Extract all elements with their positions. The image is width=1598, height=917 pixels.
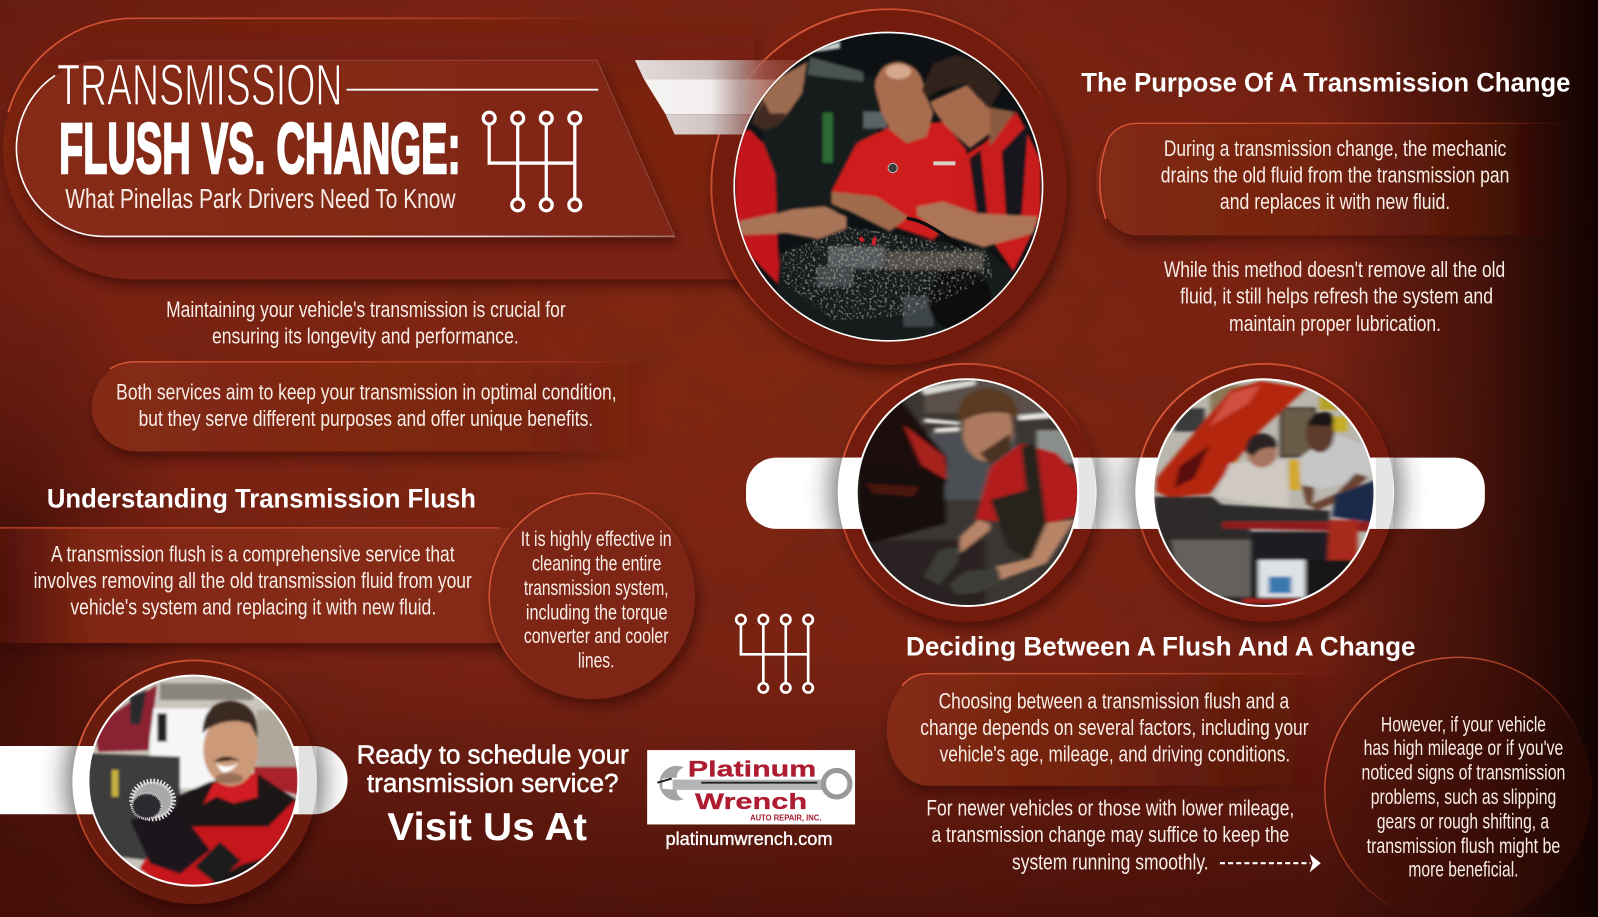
ring and white band: bottom left — [0, 654, 348, 909]
text: change method: maintain proper lubrication. — [1229, 311, 1441, 336]
panel: deciding description — [887, 674, 1345, 786]
text: call to action: Visit Us At — [387, 806, 587, 849]
bald man — [832, 122, 967, 240]
ring: top photo — [710, 8, 1067, 365]
callout: highly effective — [489, 493, 695, 699]
title: flush vs change: FLUSH VS. CHANGE: — [59, 109, 461, 189]
icon: gear shifter — [483, 112, 581, 211]
panel: deciding description: vehicle's age, mileage, and driving conditions. — [940, 741, 1290, 766]
icon: small gear shifter — [736, 615, 813, 693]
logo: platinum wrench — [647, 750, 855, 824]
callout: highly effective: converter and cooler — [524, 624, 669, 648]
text: call to action: transmission service? — [367, 770, 619, 798]
text: call to action: Ready to schedule your — [357, 741, 629, 769]
callout: highly effective: lines. — [578, 649, 615, 673]
text: change method: While this method doesn't remove all the old — [1164, 257, 1505, 282]
photo: smiling mechanic with gear — [87, 673, 300, 887]
heading: deciding between: Deciding Between A Flush And A Change — [906, 631, 1416, 661]
callout: highly effective: including the torque — [526, 601, 668, 625]
panel: flush description: vehicle's system and replacing it with new fluid. — [70, 595, 436, 620]
heading: purpose of a transmission change: The Purpose Of A Transmission Change — [1081, 68, 1570, 98]
callout: highly effective: cleaning the entire — [532, 552, 661, 576]
text: newer vehicles: a transmission change may suffice to keep the — [931, 822, 1289, 847]
panel: flush description: involves removing all the old transmission fluid from your — [34, 568, 472, 593]
panel: flush description: A transmission flush is a comprehensive service that — [51, 542, 455, 567]
callout: high mileage: more beneficial. — [1408, 857, 1518, 881]
rings and white band: middle — [746, 358, 1485, 627]
text: newer vehicles — [926, 795, 1294, 874]
text: change method: fluid, it still helps refresh the system and — [1180, 284, 1493, 309]
text: intro: Maintaining your vehicle's transmission is crucial for — [166, 297, 566, 322]
panel: both services: Both services aim to keep your transmission in optimal condition, — [116, 379, 617, 404]
text: intro: ensuring its longevity and performance. — [212, 323, 519, 348]
decorative white wedge — [635, 60, 815, 135]
panel: both services: but they serve different purposes and offer unique benefits. — [139, 406, 593, 431]
logo: platinum wrench: Platinum — [688, 757, 816, 782]
heading: understanding transmission flush: Understanding Transmission Flush — [47, 484, 476, 514]
text: website: platinumwrench.com — [665, 828, 833, 849]
panel: deciding description: change depends on several factors, including your — [920, 715, 1309, 740]
text: newer vehicles: For newer vehicles or those with lower mileage, — [926, 795, 1294, 820]
photo: mechanic under red car — [853, 377, 1082, 610]
logo: platinum wrench: AUTO REPAIR, INC. — [750, 813, 821, 822]
panel: deciding description: Choosing between a transmission flush and a — [939, 688, 1290, 713]
callout: highly effective: It is highly effective in — [521, 527, 672, 551]
engine — [777, 227, 1013, 343]
text: call to action — [357, 741, 629, 849]
panel: change description — [1096, 123, 1569, 235]
title rule — [347, 89, 598, 91]
panel: header — [3, 18, 754, 279]
subtitle: What Pinellas Park Drivers Need To Know — [65, 183, 456, 214]
text: change method — [1164, 257, 1505, 336]
panel: flush description — [0, 528, 510, 643]
callout: high mileage — [1325, 657, 1592, 916]
panel: change description: and replaces it with new fluid. — [1220, 189, 1450, 214]
icon: wrench — [657, 766, 850, 801]
title: transmission: TRANSMISSION — [57, 53, 342, 118]
panel: change description: drains the old fluid from the transmission pan — [1161, 162, 1509, 187]
panel: both services — [92, 362, 652, 451]
arrow: dashed — [1220, 854, 1321, 872]
photo: two mechanics under red hood — [1149, 377, 1383, 610]
logo: platinum wrench: Wrench — [695, 789, 807, 814]
text: intro — [166, 297, 566, 348]
photo: three mechanics at engine — [730, 30, 1047, 347]
panel: change description: During a transmission change, the mechanic — [1164, 136, 1506, 161]
right man — [957, 112, 1041, 272]
callout: highly effective: transmission system, — [524, 576, 669, 600]
text: newer vehicles: system running smoothly. — [1012, 849, 1209, 874]
left man — [752, 62, 807, 130]
